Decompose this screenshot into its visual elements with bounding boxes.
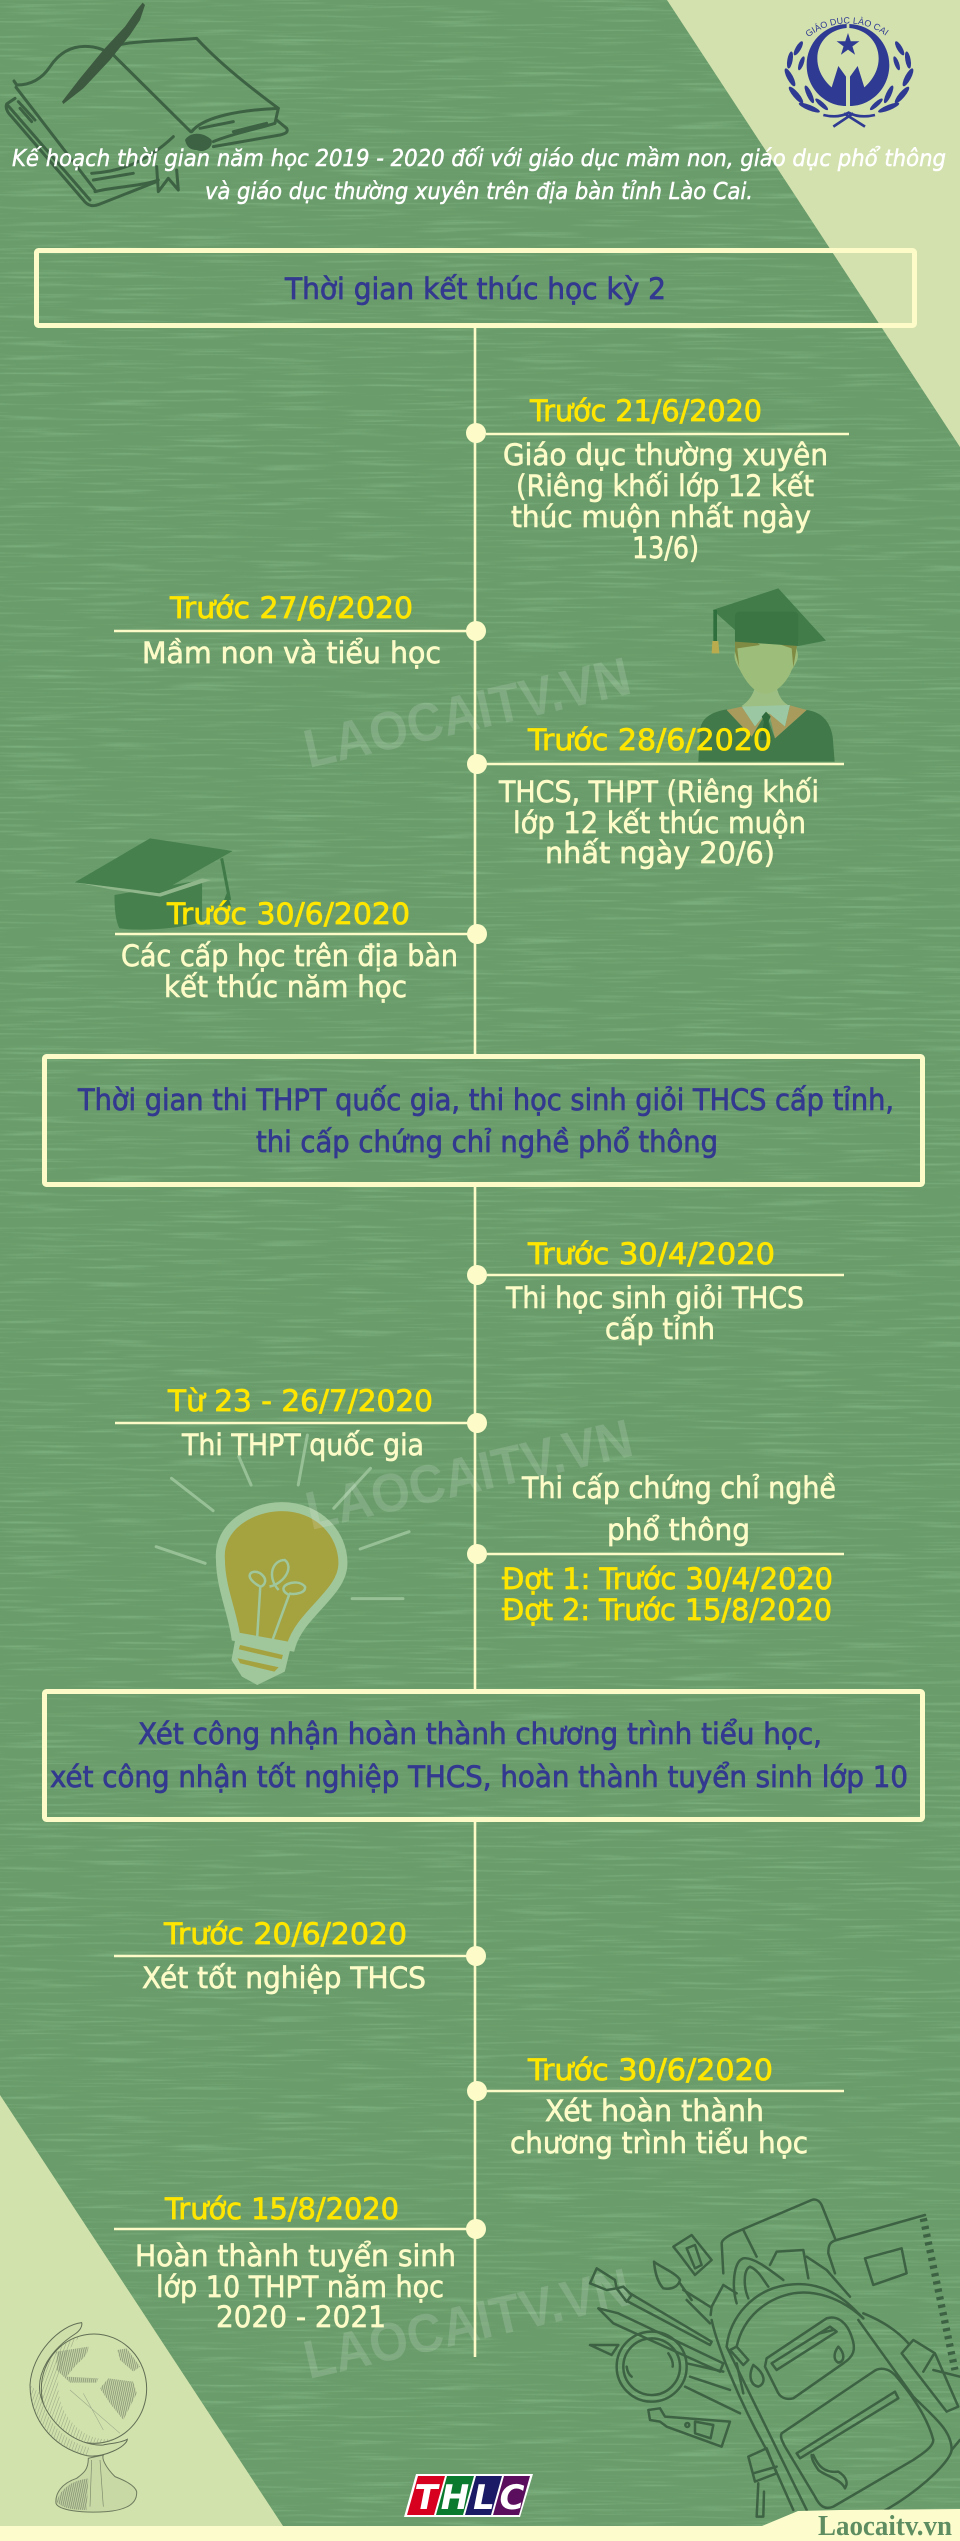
timeline item: Thi cấp chứng chỉ nghề phổ thông: Thi cấp chứng chỉ nghề — [521, 1471, 836, 1505]
heading box 2 — [44, 1056, 922, 1184]
logo: Giáo dục Lào Cai — [784, 16, 914, 128]
heading box 3 — [44, 1692, 922, 1820]
title: và giáo dục thường xuyên trên địa bàn tỉnh Lào Cai. — [205, 179, 753, 205]
watermark: middle: LAOCAITV.VN — [300, 1408, 638, 1542]
timeline item: Trước 28/6/2020: THCS, THPT (Riêng khối — [498, 775, 819, 809]
logo: THLC: C — [500, 2478, 525, 2518]
logo: THLC: H — [441, 2478, 469, 2518]
heading box 2: thi cấp chứng chỉ nghề phổ thông — [256, 1125, 718, 1159]
icon: light bulb — [156, 1435, 409, 1685]
timeline item: Trước 28/6/2020: lớp 12 kết thúc muộn — [513, 806, 806, 840]
timeline item: Trước 15/8/2020: Trước 15/8/2020 — [164, 2192, 399, 2226]
timeline item: Thi cấp chứng chỉ nghề phổ thông — [467, 1471, 844, 1627]
icon: graduation cap — [75, 838, 233, 930]
timeline item: Từ 23 - 26/7/2020 — [115, 1384, 487, 1462]
timeline item: Trước 21/6/2020: 13/6) — [632, 531, 699, 565]
timeline item: Trước 21/6/2020: Giáo dục thường xuyên — [503, 438, 828, 472]
timeline item: Trước 21/6/2020 — [466, 394, 849, 565]
timeline item: Trước 30/4/2020: Trước 30/4/2020 — [527, 1237, 775, 1271]
timeline item: Trước 27/6/2020: Mầm non và tiểu học — [142, 636, 441, 670]
icon: open book and pen — [6, 3, 287, 206]
timeline spine — [474, 328, 476, 2357]
timeline item: Trước 28/6/2020: Trước 28/6/2020 — [527, 723, 772, 757]
heading box 3: xét công nhận tốt nghiệp THCS, hoàn thành tuyển sinh lớp 10 — [50, 1760, 908, 1794]
title — [12, 146, 946, 205]
timeline item: Trước 30/6/2020 (tiểu học): chương trình tiểu học — [510, 2126, 808, 2160]
icon: school backpack and supplies — [590, 2200, 960, 2517]
timeline item: Trước 28/6/2020 — [467, 723, 844, 870]
heading box 1: Thời gian kết thúc học kỳ 2 — [284, 272, 666, 306]
timeline item: Trước 30/4/2020: Thi học sinh giỏi THCS — [505, 1281, 804, 1315]
timeline item: Trước 27/6/2020 — [114, 591, 486, 670]
bottom left pale triangle — [0, 2095, 283, 2526]
timeline item: Thi cấp chứng chỉ nghề phổ thông: Đợt 1: Trước 30/4/2020 — [502, 1562, 833, 1596]
timeline item: Trước 21/6/2020: Trước 21/6/2020 — [529, 394, 762, 428]
timeline item: Trước 30/6/2020 (các cấp học): kết thúc năm học — [164, 970, 407, 1004]
watermark: bottom: LAOCAITV.VN — [298, 2257, 636, 2391]
top right pale triangle — [667, 0, 960, 447]
timeline item: Trước 21/6/2020: (Riêng khối lớp 12 kết — [516, 469, 814, 503]
heading box 3: Xét công nhận hoàn thành chương trình tiểu học, — [138, 1717, 822, 1751]
timeline item: Thi cấp chứng chỉ nghề phổ thông: phổ thông — [607, 1513, 750, 1547]
timeline item: Thi cấp chứng chỉ nghề phổ thông: Đợt 2: Trước 15/8/2020 — [502, 1593, 832, 1627]
timeline item: Trước 30/6/2020 (tiểu học): Trước 30/6/2020 — [527, 2053, 773, 2087]
timeline item: Từ 23 - 26/7/2020: Thi THPT quốc gia — [181, 1428, 424, 1462]
logo: THLC: L — [473, 2478, 495, 2518]
timeline item: Trước 30/6/2020 (tiểu học) — [467, 2053, 844, 2160]
timeline item: Từ 23 - 26/7/2020: Từ 23 - 26/7/2020 — [167, 1384, 433, 1418]
timeline item: Trước 30/6/2020 (các cấp học): Trước 30/6/2020 — [166, 897, 410, 931]
timeline item: Trước 20/6/2020 — [114, 1917, 486, 1995]
timeline item: Trước 30/6/2020 (các cấp học): Các cấp học trên địa bàn — [121, 939, 458, 973]
timeline item: Trước 15/8/2020: 2020 - 2021 — [216, 2300, 386, 2334]
timeline item: Trước 27/6/2020: Trước 27/6/2020 — [169, 591, 413, 625]
timeline item: Trước 15/8/2020 — [114, 2192, 486, 2334]
logo: THLC — [404, 2474, 533, 2518]
watermark: top: LAOCAITV.VN — [298, 646, 636, 780]
timeline item: Trước 30/4/2020: cấp tỉnh — [605, 1312, 715, 1346]
heading box 2: Thời gian thi THPT quốc gia, thi học sinh giỏi THCS cấp tỉnh, — [77, 1083, 894, 1117]
logo arc text: GIÁO DỤC LÀO CAI — [806, 16, 889, 36]
timeline item: Trước 20/6/2020: Xét tốt nghiệp THCS — [142, 1961, 426, 1995]
logo: THLC: T — [414, 2478, 440, 2518]
timeline item: Trước 21/6/2020: thúc muộn nhất ngày — [511, 500, 811, 534]
logo emblem — [783, 24, 915, 127]
timeline item: Trước 15/8/2020: lớp 10 THPT năm học — [156, 2270, 444, 2304]
icon: desk globe — [30, 2323, 147, 2512]
timeline item: Trước 30/6/2020 (các cấp học) — [115, 897, 487, 1004]
icon: graduate student — [698, 588, 835, 762]
heading box 1 — [36, 250, 914, 326]
timeline item: Trước 20/6/2020: Trước 20/6/2020 — [163, 1917, 407, 1951]
bottom strip — [0, 2509, 960, 2541]
timeline item: Trước 28/6/2020: nhất ngày 20/6) — [545, 836, 775, 870]
timeline item: Trước 30/6/2020 (tiểu học): Xét hoàn thành — [545, 2094, 764, 2128]
timeline item: Trước 15/8/2020: Hoàn thành tuyển sinh — [135, 2239, 456, 2273]
timeline item: Trước 30/4/2020 — [467, 1237, 844, 1346]
